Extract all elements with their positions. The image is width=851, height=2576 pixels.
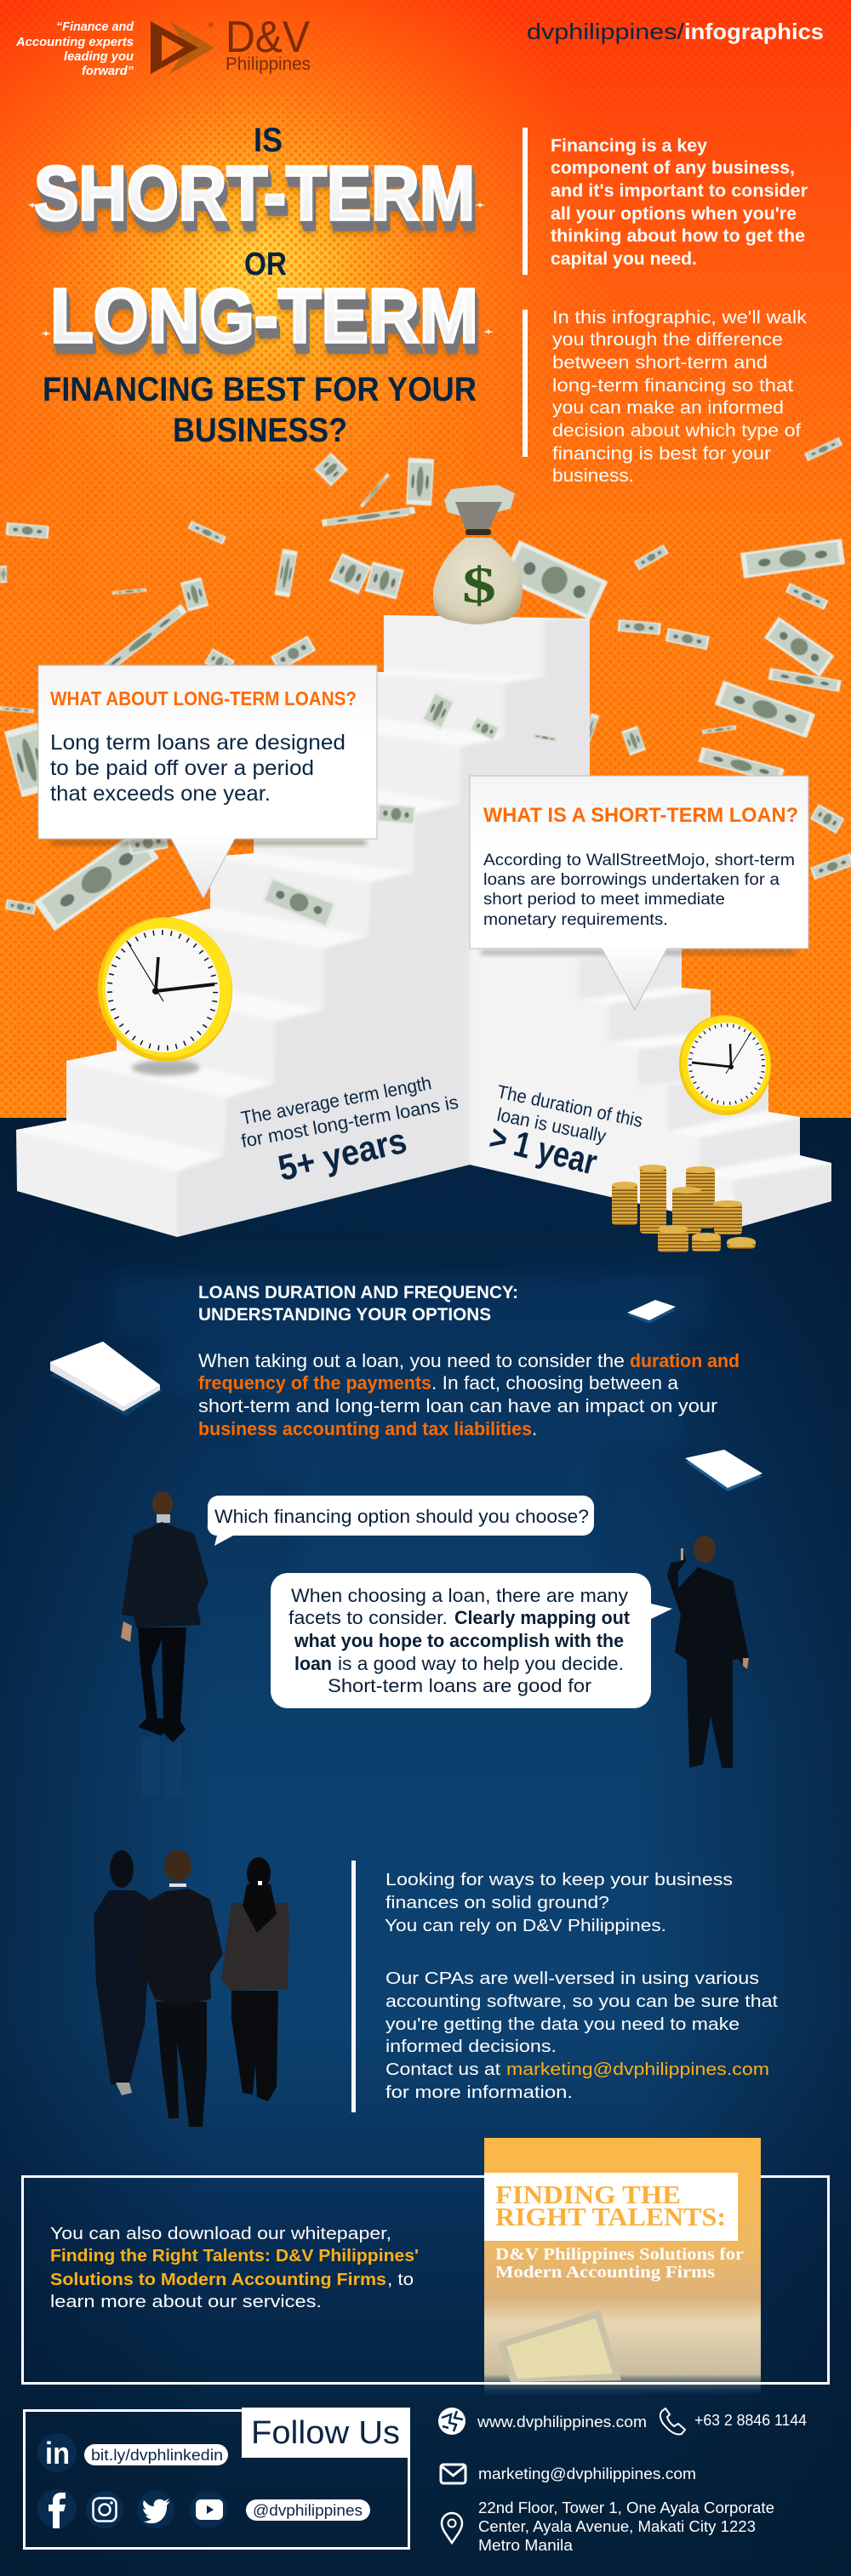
orange hero background: [0, 0, 851, 1119]
callout: what is a short-term loan: According to WallStreetMojo, short-term: [483, 852, 795, 869]
follow us banner: Follow Us: [251, 2415, 400, 2451]
businessman right: [667, 1536, 749, 1768]
short-term duration label: The duration of this: [495, 1080, 644, 1131]
address contact: Center, Ayala Avenue, Makati City 1223: [478, 2518, 756, 2535]
phone contact: [660, 2408, 807, 2435]
D&V Philippines logo: [151, 13, 311, 74]
intro paragraph one: component of any business,: [551, 158, 795, 178]
address contact: [442, 2499, 774, 2554]
long-term side wall: [177, 618, 596, 1242]
callout: what is a short-term loan: loans are borrowings undertaken for a: [483, 871, 780, 889]
callout: what is a short-term loan: [470, 776, 808, 1010]
callout: what is a short-term loan: monetary requirements.: [483, 911, 668, 929]
businessman left: [121, 1491, 208, 1797]
website contact: www.dvphilippines.com: [477, 2414, 647, 2431]
whitepaper text: learn more about our services.: [50, 2293, 322, 2311]
address contact: 22nd Floor, Tower 1, One Ayala Corporate: [478, 2499, 774, 2516]
main title: [27, 122, 494, 449]
main title: BUSINESS?: [173, 412, 347, 449]
callout: what is a short-term loan: short period to meet immediate: [483, 891, 725, 909]
icon: youtube: [190, 2491, 227, 2528]
short-term side wall: [468, 1165, 672, 1211]
social handle pill: @dvphilippines: [253, 2502, 363, 2519]
money bag with dollar sign: $: [462, 557, 496, 613]
address contact: Metro Manila: [478, 2537, 574, 2554]
intro paragraph one: thinking about how to get the: [551, 226, 805, 246]
closing pitch text: finances on solid ground?: [386, 1894, 609, 1912]
long-term treads: [13, 667, 545, 1171]
callout: what about long-term loans: that exceeds one year.: [50, 782, 271, 806]
icon: twitter: [137, 2491, 174, 2528]
large clock: [89, 909, 242, 1075]
brand tagline: Accounting experts: [15, 35, 134, 49]
closing pitch text: Contact us at: [386, 2060, 501, 2079]
falling dollar bills: [0, 437, 851, 931]
infographics link: dvphilippines/: [527, 19, 685, 44]
long-term duration label: for most long-term loans is: [239, 1091, 460, 1152]
linkedin link pill: [84, 2444, 228, 2465]
speech bubble: answer: is a good way to help you decide.: [338, 1653, 624, 1674]
whitepaper cover: FINDING THE: [495, 2180, 681, 2209]
short-term risers: [642, 988, 831, 1227]
closing pitch text: you're getting the data you need to make: [386, 2015, 740, 2034]
whitepaper panel frame: [22, 2176, 829, 2384]
callout: what about long-term loans: [38, 665, 377, 898]
speech bubble: answer: loan: [294, 1653, 332, 1674]
man centre: [138, 1849, 223, 2127]
icon: paper stack: [50, 1342, 163, 1416]
section body text: When taking out a loan, you need to consider the: [198, 1350, 625, 1371]
section body text: business accounting and tax liabilities: [198, 1418, 532, 1439]
intro paragraph one: all your options when you're: [551, 204, 797, 224]
brand tagline: forward”: [82, 64, 134, 78]
infographics link: infographics: [684, 19, 824, 44]
social handle pill: [246, 2499, 370, 2521]
intro paragraph two: [523, 308, 808, 486]
group of three colleagues: [94, 1849, 289, 2127]
section body text: [198, 1350, 740, 1439]
short-term treads: [579, 986, 836, 1180]
section heading: loans duration and frequency: [198, 1283, 518, 1325]
section body text: .: [532, 1418, 537, 1439]
long-term duration label: The average term length: [239, 1072, 433, 1129]
closing pitch text: [351, 1861, 779, 2112]
closing pitch text: informed decisions.: [386, 2037, 557, 2056]
icon: flying paper bottom: [685, 1450, 762, 1491]
woman left: [94, 1850, 149, 2095]
infographics link: [527, 19, 824, 44]
intro paragraph two: In this infographic, we'll walk: [552, 308, 808, 328]
closing pitch text: for more information.: [386, 2083, 573, 2102]
short-term duration label: > 1 year: [486, 1117, 601, 1183]
staircase shaded faces: [13, 611, 836, 1242]
long-term duration label: [239, 1072, 460, 1188]
speech bubble: answer: When choosing a loan, there are many: [291, 1585, 628, 1606]
intro paragraph two: between short-term and: [552, 353, 768, 373]
main title: LONG-TERM: [50, 274, 478, 359]
white staircase: [13, 611, 836, 1242]
icon: linkedin: [37, 2433, 77, 2472]
money bag with dollar sign: [433, 485, 523, 624]
email contact: marketing@dvphilippines.com: [478, 2465, 696, 2482]
closing pitch text: Our CPAs are well-versed in using various: [386, 1969, 759, 1988]
whitepaper cover: Modern Accounting Firms: [495, 2263, 715, 2282]
intro paragraph two: decision about which type of: [552, 421, 801, 441]
speech bubble: answer: [271, 1573, 672, 1708]
D&V Philippines logo: ®: [208, 21, 214, 29]
whitepaper cover: [484, 2138, 761, 2395]
main title: OR: [244, 247, 287, 282]
intro paragraph one: capital you need.: [551, 249, 697, 269]
callout: what about long-term loans: Long term loans are designed: [50, 731, 346, 755]
section body text: frequency of the payments: [198, 1372, 431, 1393]
section body text: duration and: [630, 1350, 740, 1371]
intro paragraph two: business.: [552, 466, 634, 486]
whitepaper text: You can also download our whitepaper,: [50, 2225, 391, 2243]
woman right: [221, 1857, 289, 2101]
staircase silhouette: [16, 615, 831, 1237]
intro paragraph two: you can make an informed: [552, 398, 784, 418]
icon: facebook: [37, 2489, 77, 2528]
icon: flying paper top: [627, 1300, 676, 1324]
whitepaper text: [50, 2225, 419, 2311]
intro paragraph one: and it's important to consider: [551, 181, 808, 201]
icon: linkedin: in: [45, 2436, 70, 2471]
phone contact: +63 2 8846 1144: [694, 2412, 807, 2429]
whitepaper text: , to: [387, 2271, 414, 2289]
brand tagline: leading you: [64, 49, 134, 64]
whitepaper text: Solutions to Modern Accounting Firms: [50, 2271, 386, 2289]
closing pitch text: accounting software, so you can be sure that: [386, 1992, 779, 2011]
intro paragraph one: Financing is a key: [551, 136, 707, 156]
small clock: [672, 1009, 778, 1121]
callout: what is a short-term loan: WHAT IS A SHORT-TERM LOAN?: [483, 804, 798, 827]
short-term duration label: [486, 1080, 644, 1183]
callout: what about long-term loans: WHAT ABOUT LONG-TERM LOANS?: [50, 687, 357, 710]
brand tagline: “Finance and: [56, 20, 134, 34]
whitepaper text: Finding the Right Talents: D&V Philippines': [50, 2247, 419, 2265]
speech bubble: question: [208, 1496, 594, 1546]
brand tagline: [15, 20, 134, 78]
whitepaper cover: D&V Philippines Solutions for: [495, 2245, 744, 2264]
speech bubble: answer: what you hope to accomplish with the: [294, 1630, 624, 1651]
follow us panel: [24, 2408, 410, 2549]
speech bubble: answer: Clearly mapping out: [454, 1607, 631, 1628]
gold coin stacks: [612, 1165, 756, 1252]
intro paragraph two: you through the difference: [552, 330, 783, 350]
linkedin link pill: bit.ly/dvphlinkedin: [91, 2447, 223, 2464]
navy lower background: [0, 1118, 851, 2576]
main title: FINANCING BEST FOR YOUR: [43, 371, 477, 408]
main title: SHORT-TERM: [34, 151, 475, 237]
callout: what about long-term loans: to be paid off over a period: [50, 756, 314, 780]
icon: instagram: [86, 2491, 123, 2528]
section heading: loans duration and frequency: UNDERSTANDING YOUR OPTIONS: [198, 1305, 491, 1325]
whitepaper cover: RIGHT TALENTS:: [495, 2202, 726, 2231]
long-term duration label: 5+ years: [274, 1120, 410, 1188]
bills over the stairs: [260, 691, 558, 929]
closing pitch text: You can rely on D&V Philippines.: [385, 1917, 666, 1935]
website contact: [438, 2408, 647, 2435]
D&V Philippines logo: Philippines: [226, 54, 311, 74]
speech bubble: answer: facets to consider.: [288, 1607, 448, 1628]
speech bubble: question: Which financing option should you choose?: [214, 1506, 589, 1527]
short-term duration label: loan is usually: [495, 1103, 608, 1147]
follow us banner: [242, 2408, 410, 2458]
D&V Philippines logo: D&V: [226, 13, 310, 62]
long-term top riser: [379, 611, 545, 676]
intro paragraph one: [523, 128, 808, 275]
section heading: loans duration and frequency: LOANS DURATION AND FREQUENCY:: [198, 1283, 518, 1302]
intro paragraph two: financing is best for your: [552, 444, 771, 464]
main title: IS: [254, 122, 283, 159]
section body text: . In fact, choosing between a: [431, 1372, 679, 1393]
closing pitch text: marketing@dvphilippines.com: [506, 2060, 769, 2079]
speech bubble: answer: Short-term loans are good for: [328, 1675, 591, 1696]
closing pitch text: Looking for ways to keep your business: [386, 1871, 733, 1889]
intro paragraph two: long-term financing so that: [552, 376, 793, 396]
section body text: short-term and long-term loan can have an impact on your: [198, 1395, 717, 1416]
